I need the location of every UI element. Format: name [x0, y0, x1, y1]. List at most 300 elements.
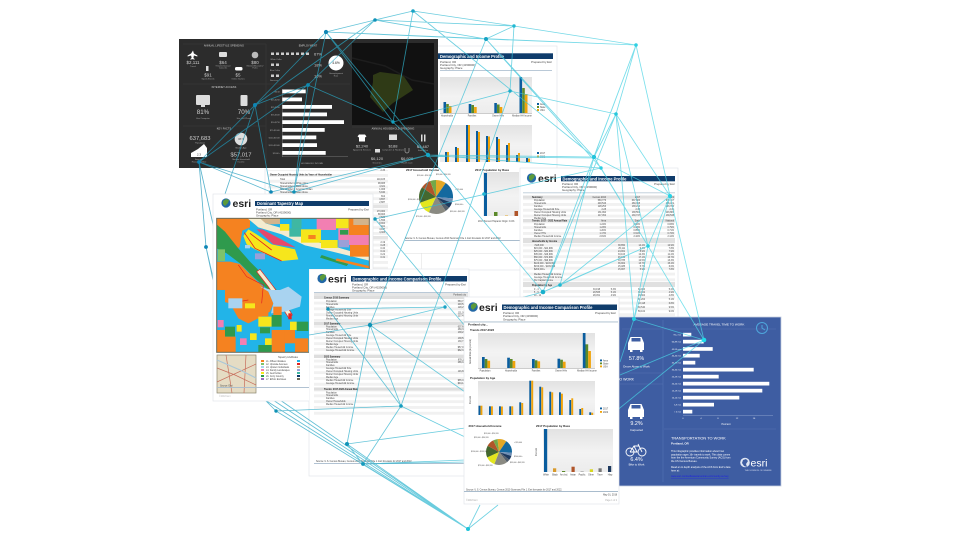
tapestry lifemode legend: L1. Affluent Estates — [266, 360, 287, 363]
title bar: Demographic and Income Comparison Profile — [352, 276, 442, 281]
heading and body: transportation to work: TRANSPORTATION TO WORK — [671, 436, 726, 440]
comparison table: 248,546 — [458, 304, 467, 306]
table: housing units: 110,105 — [377, 179, 386, 181]
summary and income table: <$15,000 — [534, 244, 544, 247]
key facts stats: Median Household — [232, 159, 251, 161]
bar chart: population by age: 2022 — [540, 156, 546, 158]
summary and income table: 286,421 — [666, 203, 675, 205]
summary and income table: 29,565 — [593, 292, 601, 294]
title bar: Demographic and Income Profile — [562, 176, 627, 181]
icon and stat: carpooled: Carpooled — [630, 428, 643, 432]
summary and income table: 5 - 9 — [534, 292, 539, 294]
table: housing units: 2,887 — [379, 202, 386, 204]
summary and income table: Families — [534, 230, 543, 232]
bar chart: travel time — [672, 333, 773, 426]
table: housing units: 88,903 — [378, 214, 386, 216]
summary and income table: 4.9% — [611, 295, 616, 297]
summary and income table: 15.4% — [667, 263, 674, 265]
bar chart: trends: USA — [540, 109, 545, 112]
source line — [217, 384, 309, 398]
comparison table: Median Age — [326, 343, 339, 346]
bar chart: travel time: 5-9 min — [674, 404, 682, 406]
report location text: Portland City, OR (4159000) — [352, 286, 387, 290]
heading and body: transportation to work: here at: — [671, 469, 680, 472]
title bar — [255, 201, 369, 206]
summary and income table: 2022 — [669, 197, 675, 199]
key facts stats: 37.3 — [238, 137, 244, 141]
summary and income table: 46,044 — [618, 257, 626, 259]
summary and income table: Census 2010 — [592, 197, 607, 199]
esri logo — [468, 302, 498, 314]
comparison table: $57,017 — [458, 347, 467, 349]
comparison table: $82,330 — [458, 350, 467, 352]
summary and income table: Trends: 2017 - 2022 Annual Rate — [532, 219, 568, 222]
bar chart: travel time: 16 — [753, 418, 756, 420]
bar chart: trends: Owner HHs — [492, 114, 505, 118]
key facts stats — [190, 133, 251, 164]
table: housing units: 4,187 — [379, 229, 386, 231]
bar chart: population by age — [469, 376, 609, 415]
bar chart: trends — [440, 77, 546, 118]
summary and income table: Households — [534, 203, 547, 205]
summary and income table: State — [635, 219, 641, 222]
pie chart: 2017 household income: $200,000+ — [455, 204, 464, 206]
comparison table: 128,253 — [458, 307, 467, 309]
summary and income table: Average Household Income — [534, 276, 563, 279]
report location text: Portland, OR — [503, 311, 519, 315]
summary and income table: 2017 — [635, 197, 641, 199]
heading: employment: EMPLOYMENT — [299, 44, 318, 48]
table: housing units — [268, 170, 388, 270]
comparison table: Average Household Income — [326, 382, 355, 385]
icon: clock — [756, 322, 768, 334]
bar chart: trends 2017-2022: USA — [603, 365, 608, 368]
summary and income table: Per Capita Income — [534, 279, 554, 282]
household spending stats: Eating Out — [418, 149, 428, 152]
employment stats: 67% — [314, 52, 322, 56]
partial heading: how we get to work: TO WORK — [617, 378, 635, 382]
pie chart: 2017 household income: $25,000 - $34,999 — [436, 174, 451, 176]
employment stats: 18% — [314, 62, 322, 68]
comparison table: Families — [326, 307, 335, 309]
source line and footer: Source: U.S. Census Bureau, Census 2010 Summary File 1. Esri forecasts for 2017 and 2022. — [466, 488, 562, 492]
bar chart: trends 2017-2022: Households — [505, 370, 518, 372]
report location text: Geography: Place — [562, 188, 585, 192]
summary and income table: 146,780 — [666, 206, 675, 208]
employment stats: Unemployment — [329, 72, 343, 75]
bar chart: 2017 population by race: Two+ — [597, 474, 603, 476]
pie chart: 2017 household income: $75,000 - $99,999 — [416, 216, 431, 218]
summary and income table: Median Age — [534, 217, 547, 220]
summary and income table: 4.8% — [669, 295, 674, 297]
summary and income table: Population — [534, 199, 546, 202]
summary and income table: 117,452 — [598, 215, 607, 217]
esri logo in white: THE SCIENCE OF WHERE — [744, 470, 772, 472]
icon and stat: drove alone: 57.8% — [629, 356, 644, 362]
bar chart: trends 2017-2022: State — [603, 362, 609, 365]
comparison table: Median Household Income — [326, 380, 354, 382]
summary and income table: Average Household Size — [534, 208, 560, 211]
internet access stats — [196, 95, 252, 120]
household spending stats: $2,240 — [356, 144, 369, 148]
pie chart: 2017 household income: 2017 Household Income — [406, 168, 439, 172]
summary and income table: 131,094 — [598, 212, 607, 214]
comparison table: $65,460 — [458, 380, 467, 382]
tapestry lifemode legend — [261, 356, 300, 381]
summary and income table: 9.5% — [669, 307, 674, 309]
summary and income table: 678,117 — [666, 200, 675, 202]
pie chart: 2017 household income: $75,000 - $99,999 — [478, 465, 493, 467]
employment stats: Rate — [334, 74, 339, 78]
summary and income table: 5.2% — [669, 289, 674, 291]
table: housing units: 2.35 — [381, 170, 386, 172]
pie chart: 2017 household income: $150,000 - $199,999 — [471, 451, 488, 453]
summary and income table: 33,785 — [618, 260, 626, 262]
summary and income table: 5.7% — [640, 266, 645, 268]
household spending stats: $6,928 — [401, 156, 414, 161]
esri logo in white: esri — [750, 458, 767, 470]
household spending stats: $6,120 — [371, 156, 384, 161]
key facts stats: Population — [195, 142, 206, 144]
summary and income table: 146,883 — [666, 212, 675, 214]
report location text: Portland City, OR (4159000) — [256, 210, 291, 214]
bar chart: household income — [269, 89, 348, 165]
summary and income table: 43,118 — [638, 303, 646, 305]
report location text: Geography: Place — [256, 214, 279, 218]
summary and income table: 0 - 4 — [534, 289, 539, 291]
summary and income table: National — [666, 219, 674, 222]
summary and income table: $35,000 - $49,999 — [534, 254, 553, 256]
employment stats: Blue Collar — [270, 69, 280, 72]
comparison table: Families — [326, 365, 335, 367]
table: housing units: Householder is American Indian — [280, 188, 313, 191]
summary and income table: 128,253 — [598, 206, 607, 208]
bar chart: household income: $75-$100K — [270, 130, 281, 132]
bar chart: 2017 population by race: 2017 Percent Hispanic Origin: 9.4% — [478, 220, 514, 223]
report location text: Portland, OR — [352, 282, 368, 286]
summary and income table: 13.3% — [667, 260, 674, 262]
icon and stat: drove alone: Drove Alone to Work — [623, 364, 650, 368]
comparison table: 138,561 — [458, 338, 467, 340]
comparison table: Households — [326, 395, 339, 397]
source line and footer: ©2018 Esri — [466, 499, 478, 502]
comparison table: 2017 Summary — [324, 324, 341, 326]
summary and income table: 4.9% — [669, 292, 674, 294]
comparison table: 269,308 — [458, 329, 467, 331]
pie chart: 2017 household income: < $15,000 — [455, 188, 463, 191]
summary and income table: 14.4% — [638, 245, 645, 247]
bar chart: trends 2017-2022: Area — [603, 359, 609, 362]
comparison table: $94,120 — [458, 383, 467, 385]
bar chart: trends 2017-2022: Annual Rate (in percent) — [469, 339, 472, 364]
heading and body: transportation to work: the US Census Bureau. — [671, 460, 698, 463]
internet access stats: 70% — [238, 109, 251, 116]
comparison table: Owner Households — [326, 400, 346, 403]
summary and income table: 11.2% — [668, 254, 674, 256]
bar chart: 2017 population by race — [475, 168, 519, 223]
report location text: Prepared by Esri — [445, 282, 466, 286]
document: demographic and income comparison table — [309, 269, 469, 476]
summary and income table: Households — [534, 227, 547, 229]
document: demographic and income profile table — [520, 168, 678, 328]
summary and income table: 2.28 — [602, 209, 607, 211]
bar chart: 2017 population by race: White — [543, 474, 550, 476]
lifestyle spending stats: Travel — [190, 65, 196, 68]
comparison table: Families — [326, 332, 335, 334]
bar chart: trends: Median HH Income — [512, 116, 533, 118]
bar chart: 2017 population by race: Black — [552, 474, 559, 476]
network of connecting lines — [199, 11, 704, 529]
bar chart: household income: HOUSEHOLD INCOME — [301, 163, 324, 165]
summary and income table: Owner Occupied Housing Units — [534, 211, 567, 214]
tapestry lifemode legend: L7. Ethnic Enclaves — [266, 378, 287, 381]
bar chart: travel time: 20-24 min — [672, 384, 682, 386]
bar chart: trends: State — [540, 106, 546, 109]
employment stats: 16% — [314, 74, 322, 78]
summary and income table: 12.9% — [667, 245, 674, 247]
tapestry lifemode legend: L5. GenXurban — [266, 372, 282, 375]
bar chart: travel time: 45-59 min — [672, 349, 682, 351]
title bar: Dominant Tapestry Map — [257, 201, 304, 206]
summary and income table: 8.9% — [640, 251, 645, 253]
bar chart: 2017 population by race: 2017 Population by Race — [536, 424, 570, 428]
source line: ©2018 Esri — [219, 395, 231, 398]
bar chart: travel time: 12 — [736, 418, 739, 420]
summary and income table: Population by Age — [532, 284, 553, 287]
comparison table: Average Household Income — [326, 349, 355, 352]
lifestyle spending stats — [186, 50, 264, 80]
summary and income table: $150,000 - $199,999 — [534, 266, 556, 268]
esri logo — [317, 274, 347, 286]
comparison table: Renter Occupied Housing Units — [326, 314, 359, 318]
summary and income table: 1.23% — [599, 227, 606, 229]
source line: Source: U.S. Census Bureau, Census 2010 Summary File 1. Esri forecasts for 2017 and 2022. — [405, 237, 501, 240]
bar chart: 2017 population by race: Hisp — [608, 474, 613, 476]
table: housing units: 4,321 — [379, 186, 386, 188]
lifestyle spending stats: Parks — [252, 67, 258, 70]
summary and income table: Owner HHs — [534, 232, 547, 235]
inset locator map — [217, 355, 256, 393]
table: housing units: Householder is White Alone — [280, 182, 309, 185]
summary and income table: 15,485 — [618, 266, 626, 268]
comparison table: Renter Occupied Housing Units — [326, 373, 359, 376]
bar chart: travel time: < 5 min — [674, 410, 682, 414]
summary and income table: 17.1% — [638, 257, 645, 259]
esri logo: esri — [479, 302, 498, 314]
comparison table: Median Age — [326, 376, 339, 379]
summary and income table: 0.72% — [667, 233, 674, 235]
table: housing units: 1,006 — [379, 189, 386, 191]
report location text: Portland, OR — [256, 208, 272, 212]
title bar: Demographic and Income Comparison Profile — [504, 305, 593, 310]
comparison table — [314, 293, 468, 415]
title bar — [561, 176, 675, 181]
comparison table: Population — [326, 326, 338, 328]
bar chart: 2017 population by race — [535, 424, 613, 476]
report location text: Portland, OR — [562, 182, 578, 186]
bar chart: household income: $150-$200K — [269, 145, 281, 147]
household spending stats: $3,487 — [417, 144, 430, 149]
summary and income table: 637,683 — [632, 200, 641, 202]
table: housing units: 1,556 — [379, 220, 386, 222]
lifestyle spending stats: Online Games — [231, 78, 245, 80]
comparison table: Census 2010 Summary — [324, 298, 350, 300]
bar chart: trends 2017-2022: Families — [532, 370, 541, 372]
comparison table: Population — [326, 300, 338, 303]
comparison table: Population — [326, 392, 338, 394]
pie chart: 2017 household income — [468, 424, 525, 467]
table: housing units: Total — [280, 178, 285, 181]
summary and income table: 0.96% — [633, 224, 640, 226]
comparison table: Owner Occupied Housing Units — [326, 337, 359, 340]
esri logo — [221, 198, 250, 208]
heading: key facts: KEY FACTS — [217, 128, 232, 130]
comparison table: Average Household Size — [326, 308, 352, 312]
summary and income table: 6.6% — [669, 266, 674, 268]
pie chart: 2017 household income: $150,000 - $199,999 — [408, 199, 425, 201]
bar chart: 2017 population by race: Pacific — [579, 474, 586, 476]
esri logo: esri — [328, 274, 347, 286]
lifestyle spending stats: $64 — [219, 60, 227, 65]
tapestry lifemode legend: L6. Cozy Country — [266, 375, 285, 378]
heading and body: transportation to work: Read an in depth analysis of the ACS from Esri's data — [671, 466, 731, 469]
icon and stat: bike: 6.4% — [630, 457, 643, 463]
bar chart: population by age: 2017 — [603, 408, 609, 410]
employment stats: Services — [270, 79, 278, 82]
lifestyle spending stats: Movies/Museums/ — [247, 66, 264, 68]
pie chart: 2017 household income: $25,000 - $34,999 — [474, 437, 489, 439]
comparison table: Portland city — [453, 294, 467, 296]
summary and income table: 139,538 — [666, 215, 675, 217]
report location text: Geography: Place — [352, 288, 375, 292]
bar chart: travel time: 10-14 min — [672, 398, 682, 400]
comparison table: Owner Occupied Housing Units — [326, 312, 359, 314]
report location text: Prepared by Esri — [654, 182, 675, 186]
summary and income table: 0.79% — [667, 227, 674, 229]
summary and income table: 31,204 — [638, 299, 646, 301]
pie chart: 2017 household income: < $15,000 — [514, 441, 522, 444]
comparison table: Median Household Income — [326, 347, 354, 349]
summary and income table: 2.30 — [636, 209, 641, 211]
table: housing units: 0.31 — [381, 257, 386, 259]
employment stats: 4.6% — [332, 61, 340, 65]
summary and income table: Median Household Income — [534, 236, 562, 238]
summary and income table: 138,214 — [632, 206, 641, 208]
summary and income table: 58,310 — [593, 311, 601, 313]
summary and income table: 7.8% — [669, 269, 674, 271]
lifestyle spending stats: Concerts — [219, 67, 227, 70]
summary and income table: 138,561 — [632, 212, 641, 214]
summary and income table: $25,000 - $34,999 — [534, 251, 553, 253]
table: housing units: 5,940 — [379, 192, 386, 194]
comparison table: 2022 Summary — [324, 356, 341, 358]
source line and footer: Page 1 of 2 — [605, 500, 618, 502]
summary and income table: 33,198 — [593, 289, 601, 291]
heading and body: transportation to work — [671, 436, 731, 472]
bar chart: population by age: Population by Age — [470, 376, 496, 380]
summary and income table: 24,061 — [618, 251, 626, 253]
comparison table: Owner Occupied Housing Units — [326, 370, 359, 373]
bar chart: 2017 population by race: Asian — [570, 474, 577, 476]
lifestyle spending stats: $2,111 — [186, 60, 200, 65]
heading: average travel time: AVERAGE TRAVEL TIME TO WORK — [694, 322, 745, 326]
summary and income table: 62,040 — [593, 307, 601, 309]
summary and income table: 41,220 — [593, 303, 601, 305]
comparison table: Households — [326, 362, 339, 364]
bar chart: 2017 population by race: Am.Ind. — [560, 474, 568, 476]
section label: Portland city... — [468, 322, 488, 326]
summary and income table: 130,747 — [632, 215, 641, 217]
bar chart: trends 2017-2022: Trends 2017-2022 — [470, 328, 494, 332]
table: housing units: 3,657 — [379, 199, 386, 201]
comparison table: Population — [326, 358, 338, 362]
table: housing units: 2.19 — [381, 242, 386, 244]
bar chart: 2017 population by race: Percent — [535, 448, 538, 456]
table: housing units: 0.28 — [381, 245, 386, 247]
summary and income table: $100,000 - $149,999 — [534, 263, 556, 265]
household spending stats — [353, 134, 430, 164]
employment stats — [270, 52, 344, 82]
report location text: Portland City, OR (4159000) — [503, 314, 538, 318]
key facts stats: 2.3 — [197, 152, 201, 156]
summary and income table: 29,304 — [638, 295, 646, 297]
summary and income table: 0.85% — [633, 230, 640, 232]
heading and body: transportation to work: This infographic provides information about how — [671, 450, 724, 453]
bar chart: trends 2017-2022: Population — [480, 370, 491, 372]
key facts stats: Household Size — [192, 162, 207, 164]
locator map — [352, 43, 434, 125]
summary and income table: $50,000 - $74,999 — [534, 257, 553, 259]
summary and income table: Renter Occupied Housing Units — [534, 214, 567, 217]
key facts stats: $57,017 — [231, 152, 251, 158]
source line: Source: U.S. Census Bureau, Census 2010 Summary File 1. Esri forecasts for 2017 and 2022. — [316, 460, 412, 463]
document: demographic and income comparison charts — [464, 297, 619, 504]
bar chart: travel time: 8 — [717, 418, 719, 420]
summary and income table: 0.91% — [633, 233, 640, 235]
table: housing units: 7,580 — [379, 217, 386, 219]
pie chart: 2017 household income: $15,000 - $24,999 — [417, 175, 432, 177]
summary and income table: 248,546 — [598, 203, 607, 205]
tapestry lifemode legend: Tapestry LifeModes — [278, 356, 299, 359]
bar chart: travel time: 15-19 min — [672, 390, 682, 392]
household spending stats: Computers & Hardware — [382, 148, 405, 152]
summary and income table: 59,102 — [638, 311, 646, 313]
bar chart: trends: Families — [468, 116, 477, 118]
bar chart: travel time: 30-34 min — [672, 370, 682, 372]
bar chart: travel time: 35-39 min — [672, 362, 682, 364]
table: housing units: 98,905 — [378, 183, 386, 185]
report location text: Prepared by Esri — [595, 311, 616, 315]
summary and income table: Population — [534, 223, 546, 226]
summary and income table: 269,308 — [632, 203, 641, 205]
summary and income table: 5.1% — [669, 299, 674, 301]
icon and stat: carpooled — [628, 404, 644, 432]
table: housing units: 3,305 — [379, 232, 386, 234]
bar chart: travel time: 4 — [700, 418, 702, 420]
bar chart: population by age: 2017 — [540, 153, 546, 155]
title bar — [438, 53, 553, 59]
bar chart: travel time: Percent — [722, 422, 731, 426]
internet access stats: Has Cell Phone — [237, 118, 252, 120]
table: housing units: 941 — [381, 226, 386, 228]
bar chart: travel time: 60-89 min — [672, 342, 682, 344]
household spending stats: Groceries — [372, 162, 382, 164]
report location text — [256, 208, 369, 217]
esri logo in white — [740, 458, 772, 472]
summary and income table: 12.5% — [638, 260, 645, 262]
summary and income table: 60,540 — [638, 307, 646, 309]
comparison table: 146,883 — [458, 371, 467, 373]
